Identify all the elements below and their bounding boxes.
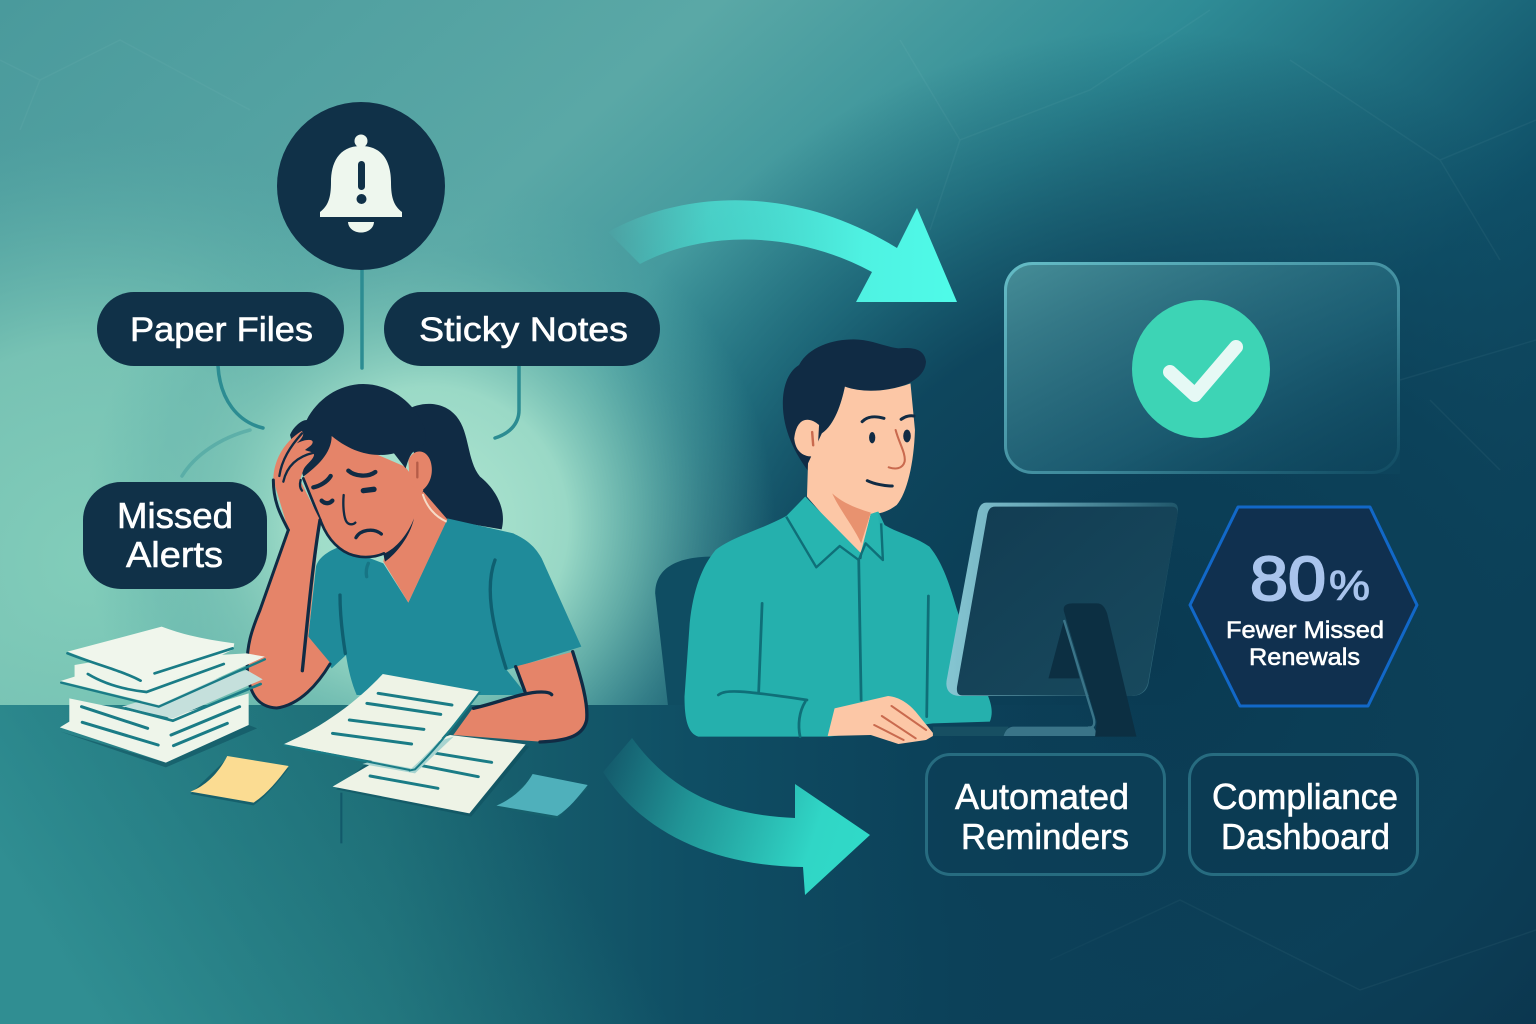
- stat badge: 80% fewer missed renewals: %: [1329, 562, 1370, 609]
- stat badge: 80% fewer missed renewals: 80: [1250, 545, 1326, 614]
- label: Paper Files: Paper Files: [130, 311, 313, 349]
- feature box: Automated Reminders: Reminders: [961, 816, 1129, 857]
- lower document: [333, 733, 529, 817]
- label: Missed Alerts: Alerts: [126, 534, 223, 575]
- paper stack and desk documents: [60, 627, 588, 843]
- jaw shadow: [383, 518, 414, 562]
- icon: check circle: [1132, 300, 1270, 438]
- ponytail hair: [407, 404, 503, 529]
- label: Sticky Notes: [384, 292, 660, 366]
- neck shadow: [832, 493, 871, 543]
- feature box: Compliance Dashboard: Dashboard: [1221, 816, 1390, 857]
- sticky note: blue: [496, 774, 588, 819]
- sad face features: [313, 471, 381, 538]
- feature box: Compliance Dashboard: Compliance: [1212, 776, 1398, 817]
- neck and face: [807, 383, 915, 558]
- arrow: curved top arrow to success card: [608, 200, 957, 302]
- ear: [794, 420, 819, 456]
- desk surface: [0, 705, 1536, 1024]
- feature box: Compliance Dashboard: [1190, 754, 1418, 874]
- top sheet: [68, 627, 234, 692]
- feature box: Automated Reminders: Automated: [955, 776, 1129, 817]
- stressed woman at desk: [247, 384, 587, 742]
- calm man at computer: [655, 339, 1178, 744]
- stat badge: 80% fewer missed renewals: Renewals: [1249, 644, 1360, 671]
- label: Paper Files: [97, 292, 344, 366]
- feature box: Automated Reminders: [926, 754, 1164, 874]
- chair: [655, 557, 712, 705]
- head: [303, 435, 423, 557]
- right forearm: [453, 652, 587, 742]
- collar: [786, 497, 883, 567]
- hand on keyboard: [828, 696, 935, 744]
- stat badge: 80% fewer missed renewals: Fewer Missed: [1226, 617, 1384, 644]
- arm outline: [247, 433, 330, 708]
- bottom paper block: [60, 693, 249, 763]
- neck: [383, 492, 447, 603]
- shadow under stack: [61, 725, 257, 767]
- shirt seams: [718, 560, 928, 737]
- arm and hand on head: [247, 431, 331, 707]
- face features: [862, 416, 914, 486]
- blouse fold lines: [340, 560, 506, 668]
- arrow: curved bottom arrow to features: [603, 738, 870, 895]
- shirt: [684, 497, 992, 737]
- middle sheet: [61, 653, 265, 705]
- sticky note: yellow: [190, 756, 289, 805]
- upper document: [283, 674, 480, 773]
- front hair: [290, 384, 426, 477]
- monitor stand: [933, 603, 1136, 737]
- ear: [408, 451, 432, 491]
- label: Missed Alerts: Missed: [117, 495, 233, 536]
- label: Missed Alerts: [83, 482, 267, 589]
- stat badge: 80% fewer missed renewals: [1190, 507, 1417, 706]
- blouse: [308, 518, 581, 695]
- icon: alert bell badge: [277, 102, 445, 270]
- light blue sheet: [122, 670, 263, 718]
- success card with check mark: [1004, 262, 1400, 474]
- monitor: [946, 503, 1178, 696]
- connector lines: [182, 265, 519, 476]
- label: Sticky Notes: Sticky Notes: [419, 311, 628, 349]
- hair: [783, 339, 926, 472]
